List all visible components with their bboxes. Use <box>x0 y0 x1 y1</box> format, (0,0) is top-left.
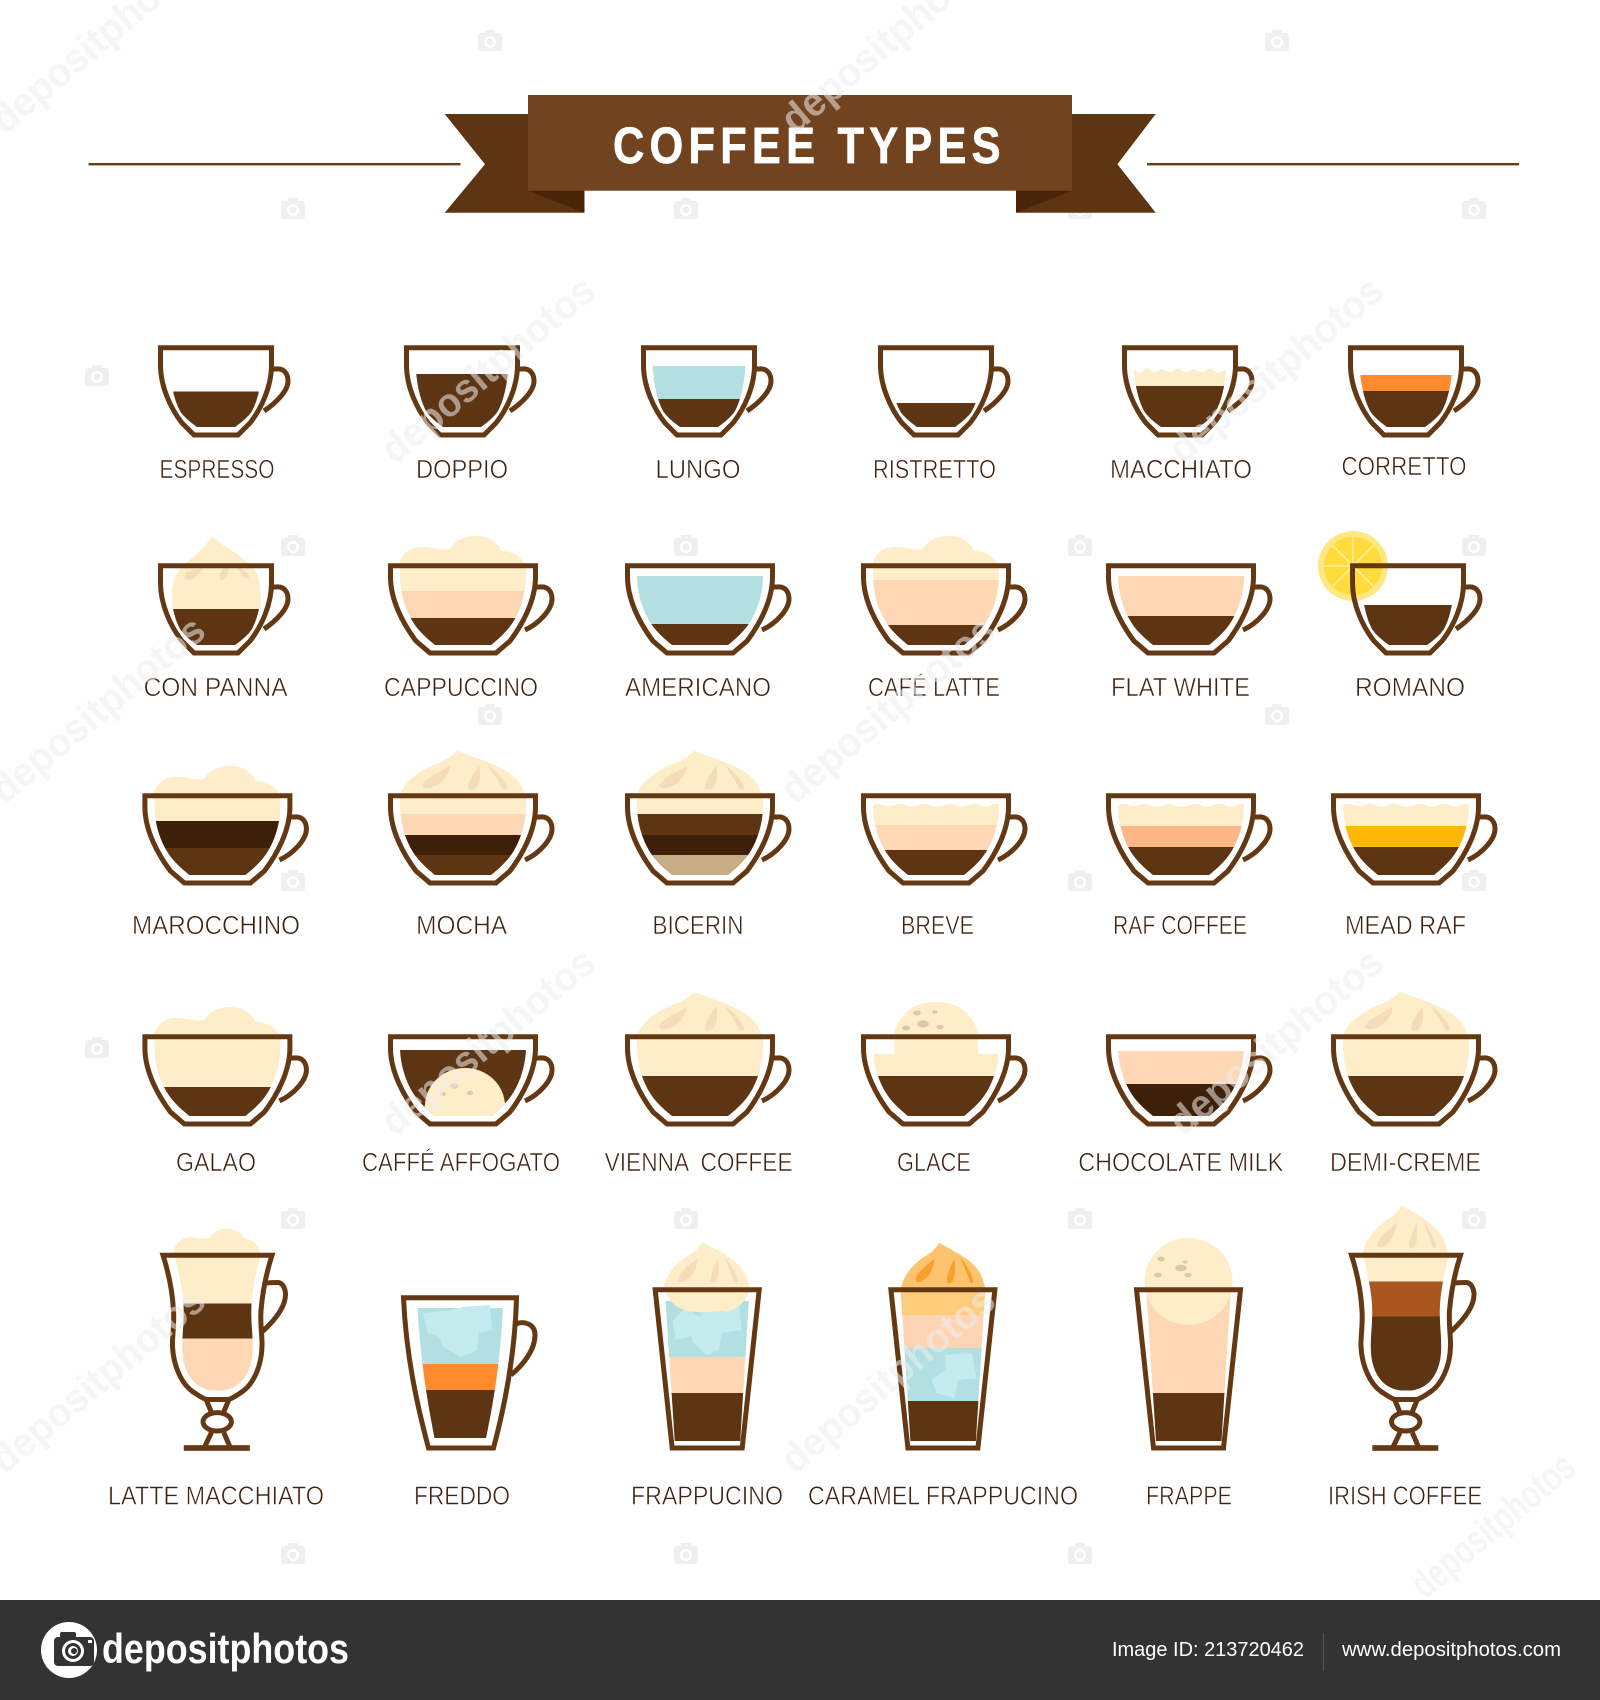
label: RAF COFFEE <box>1113 910 1247 940</box>
watermark camera marks <box>85 30 1486 1564</box>
label: CAPPUCCINO <box>384 672 538 702</box>
watermarks: depositphotos <box>373 940 604 1144</box>
coffee: Macchiato <box>1110 348 1252 484</box>
coffee: Glace <box>861 1002 1025 1177</box>
watermarks: depositphotos <box>1161 268 1392 472</box>
cup icon <box>1350 566 1480 655</box>
cup icon <box>388 1034 554 1126</box>
coffee: Caramel Frappucino <box>808 1243 1078 1511</box>
ribbon left tail <box>445 114 530 213</box>
label: IRISH COFFEE <box>1328 1481 1482 1511</box>
coffee: Bicerin <box>625 751 789 940</box>
label: ESPRESSO <box>160 454 274 484</box>
label: MACCHIATO <box>1110 454 1252 484</box>
coffee: Demi-Creme <box>1330 992 1495 1177</box>
cup icon <box>625 566 789 658</box>
coffee: Cappuccino <box>384 536 552 702</box>
cup icon <box>142 1007 306 1125</box>
label: CARAMEL FRAPPUCINO <box>808 1481 1078 1511</box>
coffee: Romano <box>1318 531 1480 702</box>
cup icon <box>625 992 789 1126</box>
coffee: Vienna Coffee <box>605 992 793 1177</box>
coffee: Doppio <box>404 348 534 484</box>
icon: camera logo <box>41 1622 97 1678</box>
label: VIENNA COFFEE <box>605 1147 793 1177</box>
coffee: Galao <box>142 1007 306 1177</box>
label: FLAT WHITE <box>1111 672 1250 702</box>
cup icon <box>388 536 552 658</box>
cup icon <box>1331 796 1495 885</box>
logo wordmark: depositphotos <box>102 1625 349 1672</box>
label: CAFFÉ AFFOGATO <box>362 1147 560 1177</box>
label: CHOCOLATE MILK <box>1078 1147 1284 1177</box>
ribbon right tail <box>1070 114 1156 213</box>
header right rule <box>1147 163 1519 165</box>
glass icon <box>1349 1205 1474 1451</box>
label: CAFÉ LATTE <box>868 672 1000 702</box>
label: LATTE MACCHIATO <box>108 1481 324 1511</box>
cup icon <box>625 751 789 885</box>
cup icon <box>861 796 1025 886</box>
cup icon <box>1348 348 1478 441</box>
watermarks: depositphotos <box>1161 940 1392 1144</box>
coffee: Frappucino <box>631 1242 783 1511</box>
label: CORRETTO <box>1342 451 1466 481</box>
coffee: Con Panna <box>144 536 288 702</box>
glass icon <box>160 1228 286 1451</box>
glass icon <box>401 1298 535 1448</box>
coffee: Marocchino <box>132 766 306 940</box>
label: ROMANO <box>1355 672 1465 702</box>
coffee: Mocha <box>388 751 552 940</box>
label: GALAO <box>176 1147 256 1177</box>
watermarks: depositphotos <box>773 608 1004 812</box>
coffee: Ristretto <box>873 348 1008 484</box>
cup icon <box>1106 796 1270 885</box>
title text: COFFEE TYPES <box>613 118 1001 175</box>
cup icon <box>861 1002 1025 1126</box>
coffee: Mead Raf <box>1331 796 1495 940</box>
coffee: Freddo <box>401 1298 535 1511</box>
glass icon <box>888 1243 997 1448</box>
coffee: Raf Coffee <box>1106 796 1270 940</box>
ribbon left fold <box>528 191 584 213</box>
ribbon right fold <box>1016 191 1072 213</box>
coffee: Flat White <box>1106 566 1270 702</box>
coffee: Americano <box>625 566 789 702</box>
watermarks: depositphotos <box>773 1278 1004 1482</box>
cup icon <box>1122 348 1252 436</box>
coffee: Irish Coffee <box>1328 1205 1482 1511</box>
label: LUNGO <box>656 454 740 484</box>
footer bar <box>0 1600 1600 1700</box>
coffee: Frappe <box>1134 1238 1243 1511</box>
label: FRAPPUCINO <box>631 1481 783 1511</box>
label: DOPPIO <box>416 454 508 484</box>
icon: lemon slice <box>1318 531 1388 601</box>
label: BREVE <box>901 910 974 940</box>
label: MAROCCHINO <box>132 910 300 940</box>
image id: Image ID: 213720462 <box>1112 1639 1304 1661</box>
glass icon <box>653 1242 762 1448</box>
coffee: Cafe Latte <box>861 536 1025 702</box>
coffee: Espresso <box>158 348 288 484</box>
coffee: Latte Macchiato <box>108 1228 324 1511</box>
label: FRAPPE <box>1146 1481 1232 1511</box>
coffee: Corretto <box>1342 348 1478 481</box>
title banner <box>445 95 1156 213</box>
website url: www.depositphotos.com <box>1341 1639 1561 1661</box>
watermarks: depositphotos <box>373 268 604 472</box>
header left rule <box>88 163 460 165</box>
ribbon main panel <box>528 95 1072 191</box>
label: AMERICANO <box>625 672 771 702</box>
cup icon <box>142 766 306 888</box>
label: DEMI-CREME <box>1330 1147 1481 1177</box>
label: GLACE <box>897 1147 971 1177</box>
label: MEAD RAF <box>1345 910 1466 940</box>
cup icon <box>1106 1037 1270 1126</box>
cup icon <box>158 536 288 659</box>
label: BICERIN <box>652 910 744 940</box>
cup icon <box>388 751 552 885</box>
label: FREDDO <box>414 1481 510 1511</box>
cup icon <box>404 348 534 435</box>
glass icon <box>1134 1238 1243 1448</box>
label: RISTRETTO <box>873 454 996 484</box>
coffee: Caffe Affogato <box>362 1037 560 1177</box>
label: CON PANNA <box>144 672 288 702</box>
coffee: Lungo <box>641 348 771 484</box>
label: MOCHA <box>416 910 508 940</box>
cup icon <box>158 348 288 442</box>
cup icon <box>1106 566 1270 656</box>
coffee: Breve <box>861 796 1025 940</box>
cup icon <box>641 348 771 439</box>
cup icon <box>861 536 1025 659</box>
coffee: Chocolate Milk <box>1078 1037 1284 1177</box>
cup icon <box>1331 992 1495 1126</box>
cup icon <box>878 348 1008 435</box>
